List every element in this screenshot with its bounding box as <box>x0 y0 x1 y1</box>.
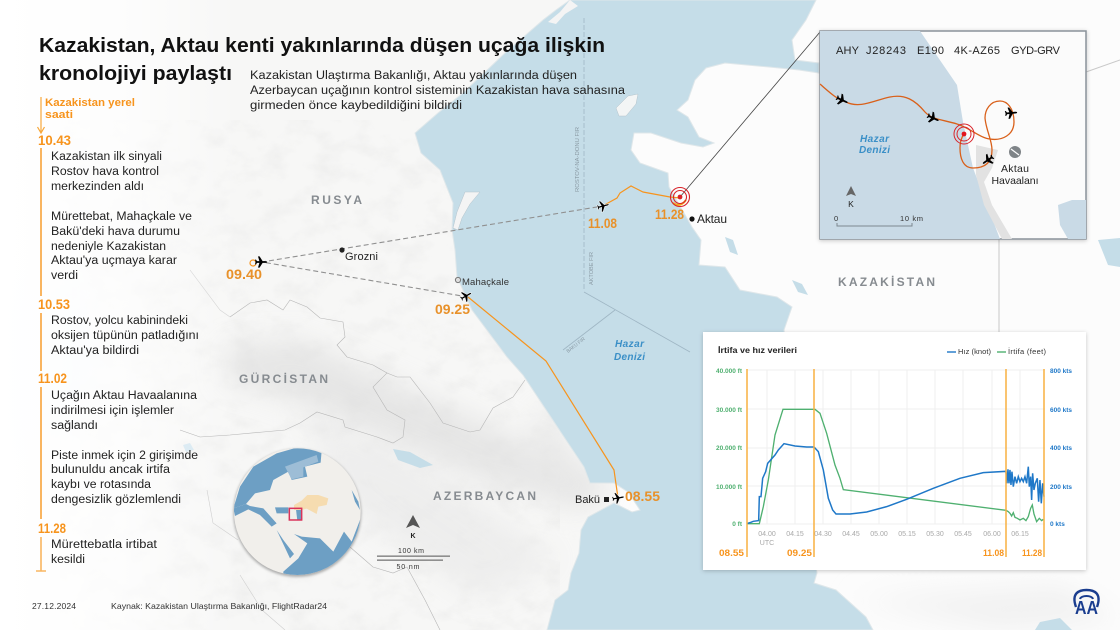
chart time marker labels <box>719 548 1042 559</box>
chart background <box>703 332 1086 570</box>
chart altitude line <box>747 409 1043 524</box>
chart left axis labels: 40.000 ft <box>716 368 743 375</box>
inset plane icons <box>834 92 1018 168</box>
time label 11.08: 11.08 <box>588 215 617 231</box>
chart time axis labels: 05.45 <box>954 531 972 538</box>
inset sea <box>820 31 1000 239</box>
inset flight info: GYD-GRV <box>1011 45 1061 57</box>
country label: Kazakistan: KAZAKİSTAN <box>838 274 935 289</box>
inset north arrow: K <box>848 199 854 209</box>
inset flight info: E190 <box>917 45 944 57</box>
chart grid <box>747 370 1045 524</box>
date: 27.12.2024 <box>32 601 76 611</box>
city: Mahaçkale: Mahaçkale <box>462 277 509 288</box>
flight route: dashed diversion <box>262 206 603 297</box>
inset scale bar: 10 km <box>900 214 923 223</box>
label: Aktobe FIR: AKTOBE FIR <box>589 252 595 285</box>
text: 10.53 events: oksijen tüpünün patladığını <box>51 330 199 342</box>
country label: Azerbaycan: AZERBAYCAN <box>433 489 536 503</box>
main map scale bar: 100 km <box>398 548 424 555</box>
text: 10.43 events <box>51 151 192 282</box>
time 11.02: 11.02 <box>38 371 67 386</box>
text: 11.02 events <box>51 390 198 506</box>
time label 09.25: 09.25 <box>435 301 470 317</box>
inset scale bar: 0 <box>834 214 838 223</box>
inset small bay <box>1058 200 1086 239</box>
chart left axis labels <box>716 368 743 528</box>
map: country borders <box>180 270 525 630</box>
globe lighter northern seas <box>285 455 318 479</box>
sea label: Hazar Denizi: Denizi <box>614 352 645 363</box>
chart right axis labels: 200 kts <box>1050 484 1072 491</box>
label: Aktau Havaalanı <box>992 163 1038 187</box>
time 10.43: 10.43 <box>38 133 71 148</box>
chart time axis labels: 04.45 <box>842 531 860 538</box>
text: 11.02 events: Uçağın Aktau Havaalanına <box>51 390 198 402</box>
timeline segment 1 <box>40 148 42 296</box>
subtitle: Kazakistan Ulaştırma Bakanlığı, Aktau yakınlarında düşen <box>250 70 577 82</box>
city: Aktau: Aktau <box>697 212 727 226</box>
text: 11.02 events: dengesizlik gözlemlendi <box>51 494 181 506</box>
map: Caspian Sea <box>415 0 873 630</box>
label: Aktau Havaalanı: Havaalanı <box>992 175 1038 187</box>
locator globe <box>233 447 363 577</box>
inset sea label: Denizi <box>859 145 890 156</box>
time label 09.40: 09.40 <box>226 266 262 282</box>
inset flight info: 4K-AZ65 <box>954 45 1000 57</box>
country label: Rusya: RUSYA <box>311 193 362 207</box>
text: 11.28 events <box>51 539 158 566</box>
timeline segment 4 <box>36 537 46 571</box>
main map scale bar <box>377 548 450 571</box>
timeline <box>36 97 199 571</box>
globe shadow <box>233 449 361 577</box>
crash marker <box>670 188 690 206</box>
subtitle <box>250 70 626 112</box>
time label 11.28: 11.28 <box>655 206 684 222</box>
text: 10.53 events: Rostov, yolcu kabinindeki <box>51 315 188 327</box>
text: 10.53 events: Aktau'ya bildirdi <box>51 345 139 357</box>
subtitle: girmeden önce kaybedildiğini bildirdi <box>250 100 462 112</box>
inset sea label <box>859 134 890 156</box>
title: Kazakistan, Aktau kenti yakınlarında düşen uçağa ilişkin <box>39 35 605 57</box>
sea label: Hazar Denizi <box>614 339 645 363</box>
label: Aktau Havaalanı: Aktau <box>1001 163 1029 175</box>
sea label: Hazar Denizi: Hazar <box>615 339 645 350</box>
subtitle: Azerbaycan uçağının kontrol sisteminin Kazakistan hava sahasına <box>250 85 626 97</box>
map: FIR boundaries <box>563 18 690 352</box>
inset urban area <box>976 145 1012 239</box>
chart time axis labels: 04.30 <box>814 531 832 538</box>
text: 10.43 events: verdi <box>51 270 78 282</box>
inset flight path <box>820 84 1014 168</box>
inset north arrow <box>846 186 856 209</box>
icon: plane 09.40 <box>255 256 267 268</box>
chart time axis labels: UTC <box>760 540 774 547</box>
main map north arrow <box>406 515 420 540</box>
chart speed line <box>747 444 1044 524</box>
chart right axis labels <box>1050 368 1072 528</box>
timeline start arrow <box>38 97 44 133</box>
city: Bakü: Bakü <box>575 494 600 506</box>
chart time axis labels: 05.15 <box>898 531 916 538</box>
chart left axis labels: 10.000 ft <box>716 484 743 491</box>
altitude and speed chart panel <box>703 332 1086 570</box>
chart time axis labels: 05.00 <box>870 531 888 538</box>
chart left axis labels: 20.000 ft <box>716 445 743 452</box>
inset map panel <box>820 31 1090 239</box>
text: 10.43 events: nedeniyle Kazakistan <box>51 241 166 253</box>
chart legend: Hız (knot) <box>958 347 992 356</box>
timeline header: local time: saati <box>45 109 73 121</box>
chart left axis labels: 0 ft <box>732 521 743 528</box>
title: kronolojiyi paylaştı <box>39 63 232 85</box>
chart time marker labels: 09.25 <box>787 548 813 559</box>
chart time markers <box>747 369 1044 557</box>
logo: Anadolu Agency <box>1074 590 1099 618</box>
chart time axis labels: 06.00 <box>983 531 1001 538</box>
timeline segment 3 <box>40 387 42 519</box>
globe: locator box <box>289 508 302 520</box>
label: Rostov FIR: ROSTOV-NA-DONU FIR <box>575 127 581 192</box>
text: 10.43 events: Rostov hava kontrol <box>51 166 159 178</box>
chart right axis labels: 400 kts <box>1050 445 1072 452</box>
time 11.28: 11.28 <box>38 521 66 536</box>
title <box>39 35 605 85</box>
text: 10.43 events: merkezinden aldı <box>51 181 144 193</box>
chart time axis labels: 04.00 <box>758 531 776 538</box>
globe: Kazakhstan highlight <box>294 495 328 514</box>
chart legend <box>947 347 1046 356</box>
text: 10.43 events: Kazakistan ilk sinyali <box>51 151 162 163</box>
map: Kazakhstan borders <box>999 60 1120 332</box>
chart time marker labels: 08.55 <box>719 548 745 559</box>
main map north arrow: K <box>410 533 416 540</box>
marker: 09.40 ring <box>250 260 256 266</box>
text: 11.02 events: kaybı ve rotasında <box>51 479 152 491</box>
country label: Gürcistan: GÜRCİSTAN <box>239 371 328 386</box>
globe land <box>234 448 361 575</box>
label: Baku FIR: BAKU FIR <box>566 336 587 355</box>
chart time axis labels: 06.15 <box>1011 531 1029 538</box>
timeline header: local time: Kazakistan yerel <box>45 97 135 109</box>
inset flight info: AHY <box>836 45 860 57</box>
chart right axis labels: 0 kts <box>1050 521 1065 528</box>
city: Grozni <box>339 247 378 263</box>
chart time marker labels: 11.28 <box>1022 548 1042 559</box>
timeline header: local time <box>45 97 135 121</box>
inset crash marker <box>954 124 974 144</box>
main map scale bar: 50 nm <box>396 564 420 571</box>
text: 11.02 events: indirilmesi için işlemler <box>51 405 174 417</box>
flight route: Kazakh airspace to crash <box>603 186 680 206</box>
inset sea label: Hazar <box>860 134 890 145</box>
timeline segment 2 <box>40 313 42 371</box>
chart time axis labels: 05.30 <box>926 531 944 538</box>
text: 11.02 events: Piste inmek için 2 girişimde <box>51 450 198 462</box>
text: 11.28 events: Mürettebatla irtibat <box>51 539 158 551</box>
text: 10.43 events: Mürettebat, Mahaçkale ve <box>51 211 192 223</box>
globe seas <box>233 447 363 577</box>
chart title: İrtifa ve hız verileri <box>718 345 797 355</box>
source: Kaynak: Kazakistan Ulaştırma Bakanlığı, FlightRadar24 <box>111 601 327 611</box>
text: 11.02 events: bulunuldu ancak irtifa <box>51 464 171 476</box>
text: 10.53 events <box>51 315 199 357</box>
chart right axis labels: 600 kts <box>1050 407 1072 414</box>
icon: plane 08.55 <box>611 491 625 505</box>
icon: plane 09.25 <box>458 288 474 304</box>
inset background <box>820 31 1086 239</box>
text: 11.02 events: sağlandı <box>51 420 98 432</box>
logo: Anadolu Agency: AA <box>1075 598 1098 618</box>
flight route: Baku to Mahachkala <box>468 297 618 498</box>
text: 10.43 events: Bakü'deki hava durumu <box>51 226 180 238</box>
city: Grozni: Grozni <box>345 251 378 263</box>
text: 11.28 events: kesildi <box>51 554 85 566</box>
inset flight info: J28243 <box>866 45 906 57</box>
chart time axis labels <box>758 531 1029 547</box>
chart left axis labels: 30.000 ft <box>716 407 743 414</box>
time label 08.55: 08.55 <box>625 488 660 504</box>
map: left white fade <box>0 0 240 630</box>
inset scale bar <box>834 214 923 226</box>
chart right axis labels: 800 kts <box>1050 368 1072 375</box>
chart time axis labels: 04.15 <box>786 531 804 538</box>
time 10.53: 10.53 <box>38 297 70 312</box>
icon: plane 11.08 <box>596 199 610 213</box>
connector to inset <box>680 32 820 197</box>
chart time marker labels: 11.08 <box>983 548 1004 559</box>
icon: airport <box>1009 146 1021 158</box>
text: 10.43 events: Aktau'ya uçmaya karar <box>51 255 177 267</box>
chart legend: İrtifa (feet) <box>1008 347 1046 356</box>
inset flight info <box>836 45 1061 57</box>
